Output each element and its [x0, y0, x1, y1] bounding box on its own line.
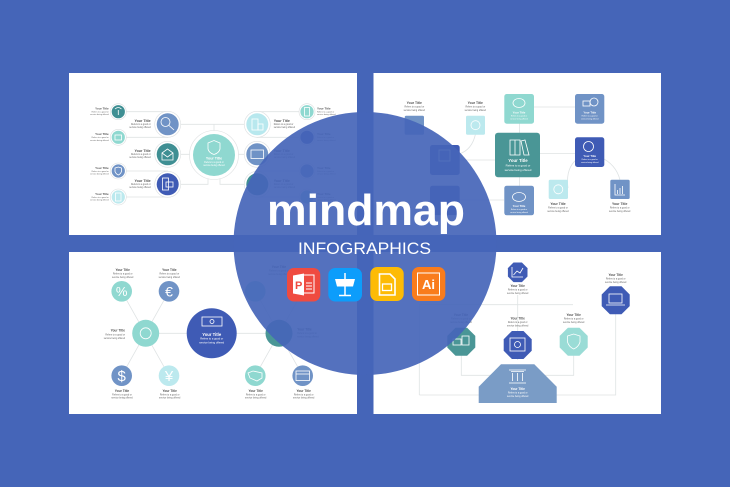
node: right small 4: Refers to a good or	[317, 196, 334, 199]
node: right small 2: Your Title	[317, 132, 331, 136]
node: left large 2: Your Title	[134, 149, 151, 153]
node: bank base shape: Your Title	[510, 387, 525, 391]
node: euro: Refers to a good or	[159, 272, 179, 276]
node: right large 1: service being offered	[274, 126, 296, 129]
node: dollar: Refers to a good or	[112, 394, 132, 396]
node: left large 1: Refers to a good or	[131, 123, 151, 126]
node: percent: service being offered	[112, 276, 134, 279]
node: map: Your Title	[248, 389, 263, 393]
node: laptop octagon: Refers to a good or	[606, 278, 626, 280]
node: left large 2	[129, 141, 181, 167]
panel: octagon mind map	[374, 252, 661, 414]
node: small chart square: service being offered	[609, 210, 631, 213]
node: lower left square	[430, 186, 460, 215]
node: small light square bottom: Your Title	[550, 202, 566, 206]
node: top right spoke two	[292, 281, 313, 302]
node: top right spoke one: Your Title	[272, 265, 286, 269]
node: right large 3: Your Title	[274, 179, 290, 183]
node: left small 2	[90, 129, 126, 145]
node: documents octagon: service being offered	[450, 321, 472, 324]
node: dollar	[111, 365, 133, 400]
node: top mint square: Your Title	[513, 110, 526, 114]
node: safe octagon	[504, 316, 532, 359]
node: chart octagon: Your Title	[510, 284, 525, 288]
node: right large 3: service being offered	[274, 186, 296, 189]
node: center teal square: Refers to a good or	[506, 164, 530, 168]
node: small chart square: Refers to a good or	[610, 207, 630, 210]
node: shield octagon: Refers to a good or	[564, 318, 584, 321]
node: safe octagon: Your Title	[510, 316, 525, 320]
node: left small 2: Your Title	[95, 132, 109, 136]
node: small square top left	[404, 101, 426, 135]
node: bank base shape: service being offered	[507, 395, 529, 398]
node: right small 1	[299, 104, 336, 120]
node: left large 2: service being offered	[129, 156, 151, 159]
node: right large 1: Your Title	[274, 119, 290, 123]
node: left small 4	[90, 189, 126, 205]
node: right small 2	[299, 129, 336, 145]
node: right blue square: Your Title	[583, 154, 596, 158]
node: left small 1: Refers to a good or	[92, 110, 109, 114]
node: euro	[159, 268, 181, 302]
node: left large 3: Refers to a good or	[131, 183, 151, 186]
node: chart octagon	[507, 262, 529, 295]
node: shield octagon: Your Title	[566, 313, 581, 317]
node: right large 3: Refers to a good or	[274, 183, 294, 186]
node: percent	[111, 268, 134, 302]
node: right small 2: service being offered	[317, 140, 336, 142]
node: left hub	[104, 320, 159, 347]
node: yen: Your Title	[162, 389, 177, 393]
node: card	[292, 365, 315, 400]
node: right hub: Your Title	[297, 327, 312, 331]
node: right small 4	[299, 189, 336, 205]
node: euro: Your Title	[162, 268, 177, 272]
node: right small 1: service being offered	[317, 114, 336, 116]
node: left small 4: service being offered	[90, 200, 109, 202]
node: top right square: Your Title	[583, 110, 596, 114]
node: center teal square: Your Title	[508, 158, 528, 163]
node: right large 2: Your Title	[274, 149, 290, 153]
node: right large 2: Refers to a good or	[274, 153, 294, 156]
icon: PowerPoint: P	[295, 280, 302, 292]
node: euro: €	[165, 284, 173, 300]
node: documents octagon: Your Title	[454, 313, 468, 317]
node: laptop octagon	[602, 273, 630, 314]
node: left small 3	[90, 163, 126, 179]
central node: Your Title	[206, 156, 222, 160]
node: center money circle: Your Title	[202, 332, 222, 337]
node: right blue square: service being offered	[581, 161, 598, 164]
node: left large 1: Your Title	[134, 119, 151, 123]
node: left large 3: service being offered	[129, 186, 151, 189]
node: right large 3	[244, 171, 296, 197]
node: left small 4: Your Title	[95, 192, 109, 196]
node: top right square	[575, 94, 604, 124]
node: chart octagon: service being offered	[507, 292, 529, 295]
node: left small 4: Refers to a good or	[92, 196, 109, 199]
node: chart octagon: Refers to a good or	[508, 288, 528, 292]
node: yen: ¥	[164, 368, 174, 385]
node: top right spoke one	[245, 265, 290, 302]
node: left small 3: Your Title	[95, 166, 109, 170]
node: card: service being offered	[293, 396, 315, 400]
node: card: Refers to a good or	[294, 394, 314, 396]
node: right blue square	[575, 137, 604, 167]
node: dollar: $	[118, 368, 127, 385]
node: center teal square	[495, 133, 540, 177]
panel: rounded squares mind map	[374, 73, 661, 235]
node: right large 2	[244, 141, 296, 167]
node: top right spoke one: Refers to a good or	[269, 270, 289, 272]
node: right small 2: Refers to a good or	[317, 136, 334, 139]
node: bottom square: Your Title	[513, 204, 526, 208]
node: bottom square	[504, 186, 534, 215]
node: map	[245, 365, 267, 400]
node: right hub: service being offered	[297, 335, 319, 338]
node: right hub: Refers to a good or	[297, 332, 317, 335]
node: left small 2: Refers to a good or	[92, 136, 109, 139]
node: documents octagon: Refers to a good or	[451, 318, 471, 320]
node: left small 2: service being offered	[90, 140, 109, 142]
node: top right square: service being offered	[581, 118, 598, 120]
node: left small 1: Your Title	[95, 106, 109, 110]
node: small chart square: Your Title	[612, 202, 627, 206]
node: right small 4: service being offered	[317, 200, 336, 202]
node: right small 1: Refers to a good or	[317, 110, 334, 114]
node: right small 3	[299, 163, 336, 179]
node: left hub: Refers to a good or	[105, 334, 125, 336]
node: left small 1: service being offered	[90, 114, 109, 116]
node: small chart square	[609, 180, 631, 213]
node: right small 4: Your Title	[317, 192, 331, 196]
node: safe octagon: Refers to a good or	[508, 321, 528, 324]
large overlay circle	[234, 112, 496, 375]
node: top right spoke one: service being offered	[268, 273, 290, 276]
node: small light square bottom: service being offered	[547, 210, 569, 213]
node: top right square: Refers to a good or	[582, 114, 598, 118]
icon: Illustrator	[412, 267, 445, 301]
panel: concentric circles mind map	[69, 73, 357, 235]
node: safe octagon: service being offered	[507, 324, 529, 328]
node: bank base shape	[479, 364, 557, 403]
node: right small 1: Your Title	[317, 106, 331, 110]
node: yen: service being offered	[159, 396, 181, 400]
node: percent: Refers to a good or	[113, 272, 133, 276]
node: small light square top: service being offered	[465, 109, 487, 112]
node: shield octagon	[560, 313, 588, 356]
node: right small 3: Your Title	[317, 166, 331, 170]
node: shield octagon: service being offered	[563, 321, 585, 324]
node: small light square top	[465, 101, 487, 135]
node: left small 3: Refers to a good or	[92, 170, 109, 173]
node: percent: %	[116, 284, 128, 299]
node: left large 3: Your Title	[134, 179, 151, 183]
central node: Refers to a good or	[204, 161, 224, 164]
node: left small 3: service being offered	[90, 174, 109, 176]
node: top mint square: service being offered	[510, 118, 528, 120]
node: small light square bottom: Refers to a good or	[548, 207, 568, 210]
node: bottom square: service being offered	[510, 211, 528, 214]
node: left blue square	[430, 145, 460, 175]
node: center money circle: Refers to a good or	[200, 336, 223, 340]
node: yen	[159, 365, 181, 400]
node: center money circle: service being offered	[199, 340, 225, 344]
icon: Google Slides	[370, 267, 404, 301]
node: map: Refers to a good or	[246, 394, 266, 396]
node: left large 2: Refers to a good or	[131, 153, 151, 156]
node: small light square top: Refers to a good or	[465, 106, 485, 109]
node: top mint square: Refers to a good or	[511, 114, 527, 118]
node: dollar: service being offered	[111, 396, 133, 400]
main title: mindmap	[267, 186, 465, 235]
node: yen: Refers to a good or	[160, 394, 180, 396]
node: percent: Your Title	[115, 268, 130, 272]
icon: Keynote	[328, 268, 362, 302]
node: bottom square: Refers to a good or	[511, 208, 527, 211]
node: top mint square	[504, 94, 534, 124]
node: left large 1	[129, 111, 181, 137]
central node	[190, 130, 238, 180]
node: center teal square: service being offered	[505, 168, 532, 172]
panel: hub and spoke mind map	[69, 252, 357, 414]
node: bank base shape: Refers to a good or	[508, 392, 528, 394]
subtitle: INFOGRAPHICS	[298, 240, 431, 258]
node: documents octagon	[447, 313, 475, 356]
node: left hub: Your Title	[111, 328, 125, 332]
node: card: Your Title	[296, 389, 311, 393]
node: small light square top: Your Title	[468, 101, 483, 105]
central node: service being offered	[203, 164, 225, 167]
node: right hub	[266, 320, 319, 347]
node: map: service being offered	[245, 396, 267, 400]
node: small square top left: service being offered	[404, 109, 426, 112]
node: laptop octagon: service being offered	[605, 281, 627, 284]
node: right large 2: service being offered	[274, 156, 296, 159]
icon: Illustrator: Ai	[422, 277, 435, 292]
node: center money circle	[187, 308, 237, 358]
node: right small 3: Refers to a good or	[317, 170, 334, 173]
node: left large 3	[129, 171, 181, 197]
icon: PowerPoint	[287, 268, 320, 302]
node: small square top left: Your Title	[407, 101, 422, 105]
node: right large 1: Refers to a good or	[274, 123, 294, 126]
node: right small 3: service being offered	[317, 174, 336, 176]
node: left large 1: service being offered	[129, 126, 151, 129]
node: small light square bottom	[547, 180, 569, 213]
node: right blue square: Refers to a good or	[582, 158, 598, 161]
node: left small 1	[90, 104, 126, 120]
node: euro: service being offered	[159, 276, 181, 279]
node: laptop octagon: Your Title	[608, 273, 623, 277]
node: dollar: Your Title	[115, 389, 129, 393]
node: left hub: service being offered	[104, 337, 126, 340]
node: small square top left: Refers to a good or	[404, 106, 424, 109]
node: right large 1	[244, 111, 296, 137]
